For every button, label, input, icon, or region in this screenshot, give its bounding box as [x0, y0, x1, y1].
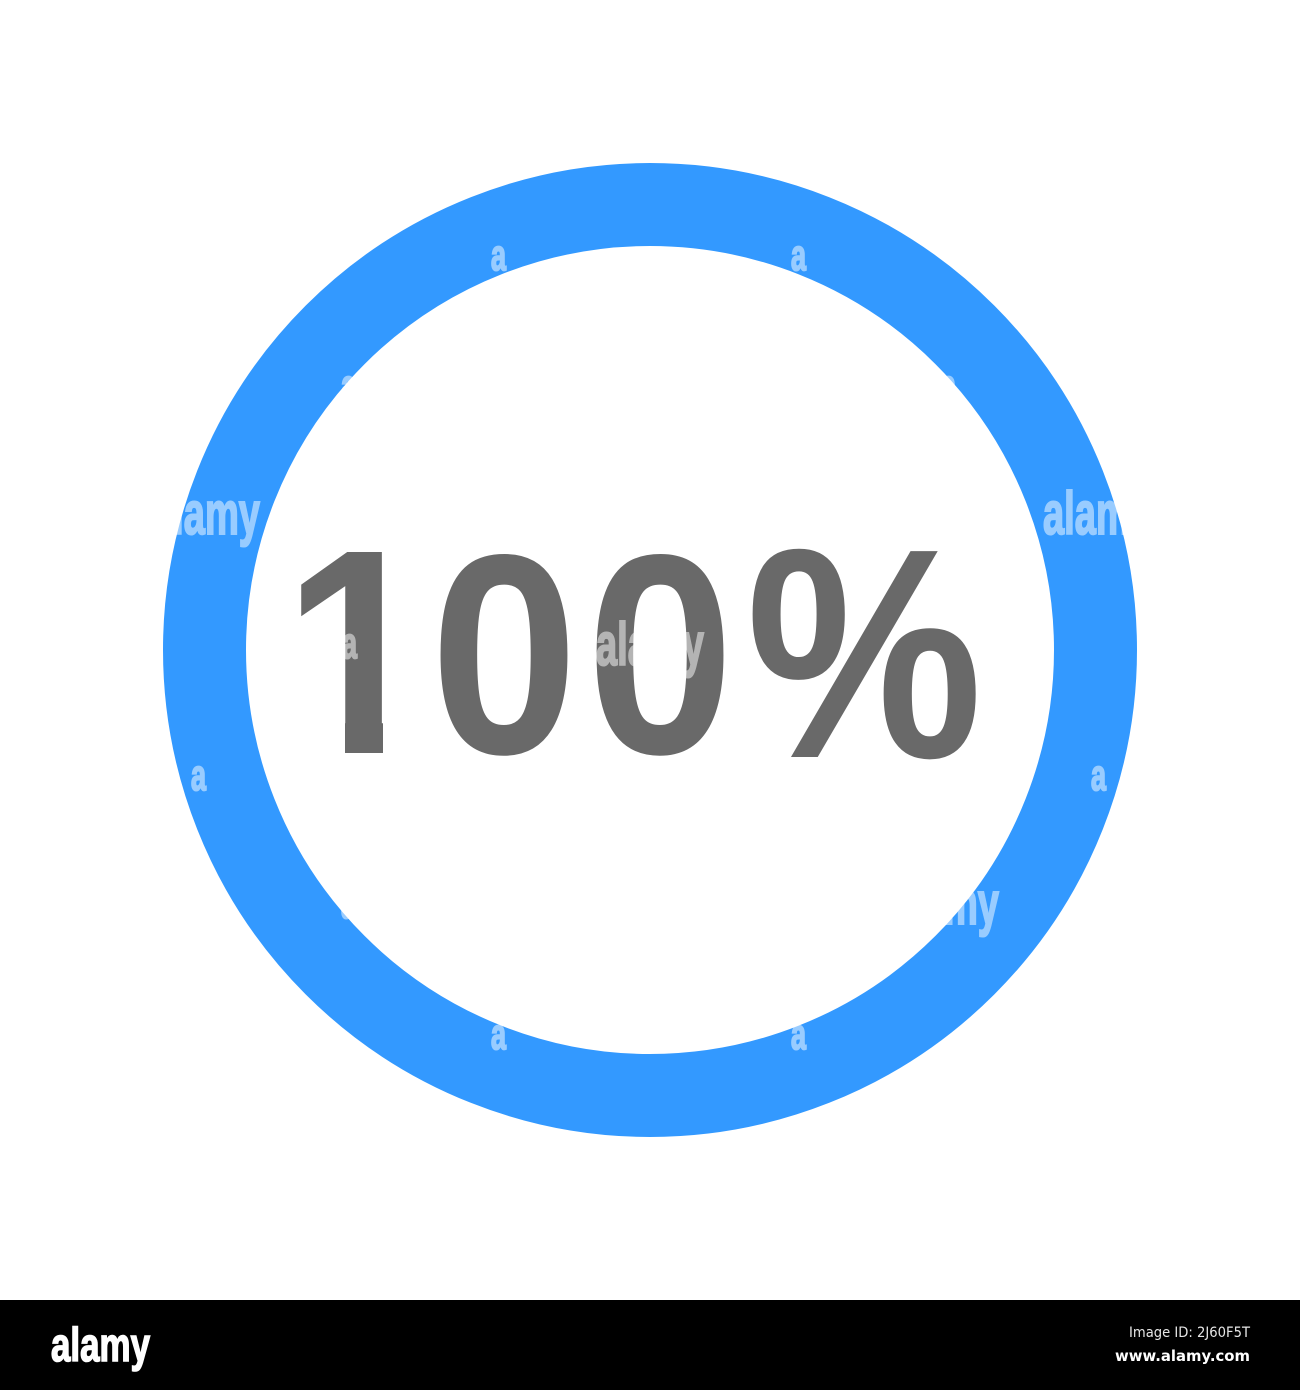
watermark pattern: a — [1091, 751, 1106, 800]
watermark pattern: a — [791, 1010, 806, 1059]
watermark pattern: a — [191, 751, 206, 800]
progress ring — [204, 204, 1096, 1096]
watermark pattern: alamy — [596, 611, 704, 678]
watermark pattern: alamy — [152, 480, 260, 547]
percentage value — [301, 548, 976, 760]
watermark pattern: alamy — [1043, 480, 1151, 547]
image id: Image ID: 2J60F5T — [1129, 1325, 1250, 1341]
website: www.alamy.com — [1115, 1347, 1250, 1365]
footer bar — [0, 1300, 1300, 1390]
watermark pattern: a — [341, 879, 356, 928]
watermark pattern: alamy — [891, 870, 999, 937]
watermark pattern: a — [491, 231, 506, 280]
percentage value: % — [746, 488, 983, 821]
watermark pattern: a — [342, 619, 357, 668]
watermark pattern: a — [341, 361, 356, 410]
watermark pattern — [152, 231, 1151, 1059]
watermark pattern: a — [791, 231, 806, 280]
watermark pattern: a — [491, 1010, 506, 1059]
percentage value: 1 — [283, 490, 431, 816]
percentage value: 00 — [430, 496, 734, 814]
watermark pattern: a — [941, 361, 956, 410]
footer logo: alamy — [51, 1318, 150, 1371]
